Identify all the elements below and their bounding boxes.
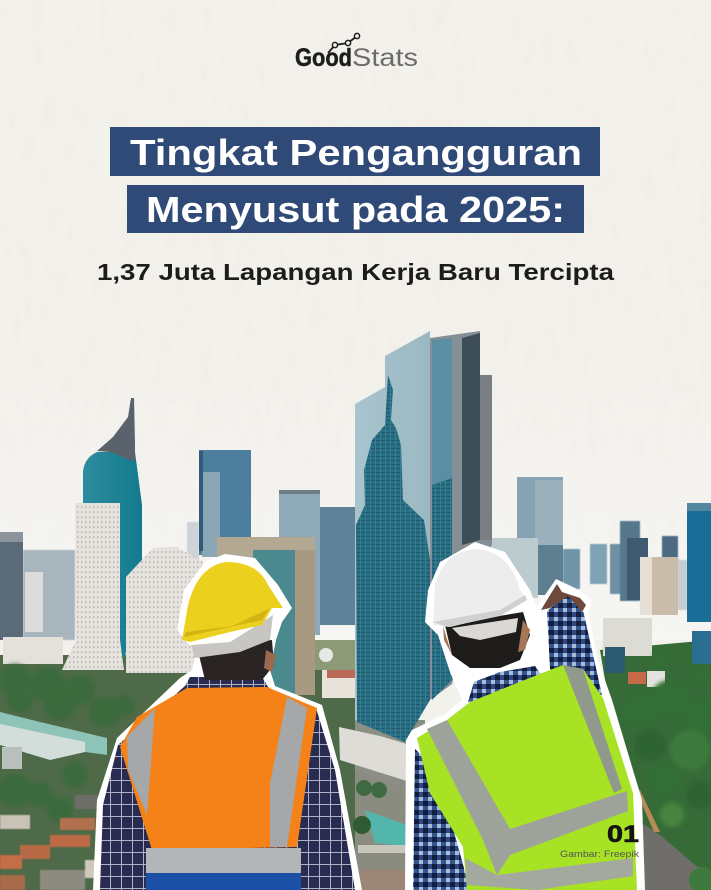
- worker: left, orange vest: [93, 554, 362, 890]
- ground: city and greenery: [0, 640, 711, 890]
- building: far left tower: [0, 532, 63, 664]
- image credit: Gambar: Freepik: [560, 849, 639, 860]
- bottom reflective strip: [146, 848, 301, 873]
- logo: GoodStats: Good: [295, 44, 352, 72]
- low building and pool: centre: [339, 727, 410, 890]
- right reflective strip: [270, 697, 307, 847]
- building: white tower: [62, 503, 124, 670]
- helmet: [182, 562, 283, 642]
- logo: GoodStats: [295, 33, 418, 72]
- left sleeve: [413, 749, 470, 890]
- title: line 1: Tingkat Pengangguran: [130, 132, 582, 173]
- page number: 01: [607, 821, 639, 848]
- building: teal tower with spire: [83, 398, 142, 657]
- head and hair: [443, 612, 530, 668]
- hazy distant buildings: [23, 521, 687, 640]
- shirt: [100, 677, 355, 890]
- subtitle: 1,37 Juta Lapangan Kerja Baru Tercipta: [97, 259, 615, 285]
- white sticker outline: [93, 554, 362, 890]
- title: line 1: [110, 127, 600, 176]
- lower reflective strip: [465, 858, 633, 890]
- orange vest: [120, 687, 317, 850]
- head strap: [191, 615, 273, 658]
- city skyline photo: [0, 331, 711, 890]
- raised arm: [547, 595, 602, 695]
- rooftops: bottom left: [0, 795, 100, 890]
- trees: right: [622, 652, 711, 827]
- hand: [541, 584, 586, 612]
- building: white block: [126, 547, 203, 673]
- white sticker outline: [405, 542, 645, 890]
- green vest: [417, 665, 637, 890]
- reflective strap and strip: [427, 720, 628, 875]
- trees: left foreground: [0, 664, 135, 823]
- building: beige tower: [217, 537, 315, 695]
- buildings: right skyline: [492, 477, 711, 687]
- right reflective strap: [563, 665, 622, 793]
- small houses behind left worker: [315, 640, 357, 698]
- blue trousers band: [146, 873, 301, 890]
- title: line 2: Menyusut pada 2025:: [146, 189, 565, 230]
- white helmet: [433, 549, 527, 627]
- title: line 2: [127, 185, 584, 233]
- collar: [468, 666, 542, 702]
- river and station: [0, 712, 107, 769]
- worker: right, green vest: [405, 542, 645, 890]
- head strap: [452, 618, 518, 640]
- building: blue tower: [199, 450, 251, 557]
- road: bottom right: [636, 790, 711, 890]
- buildings: mid towers: [279, 490, 357, 635]
- logo: GoodStats: Stats: [352, 44, 418, 72]
- building: large glass tower: [355, 331, 492, 742]
- neck and hair: [197, 640, 276, 680]
- left reflective strip: [127, 708, 155, 815]
